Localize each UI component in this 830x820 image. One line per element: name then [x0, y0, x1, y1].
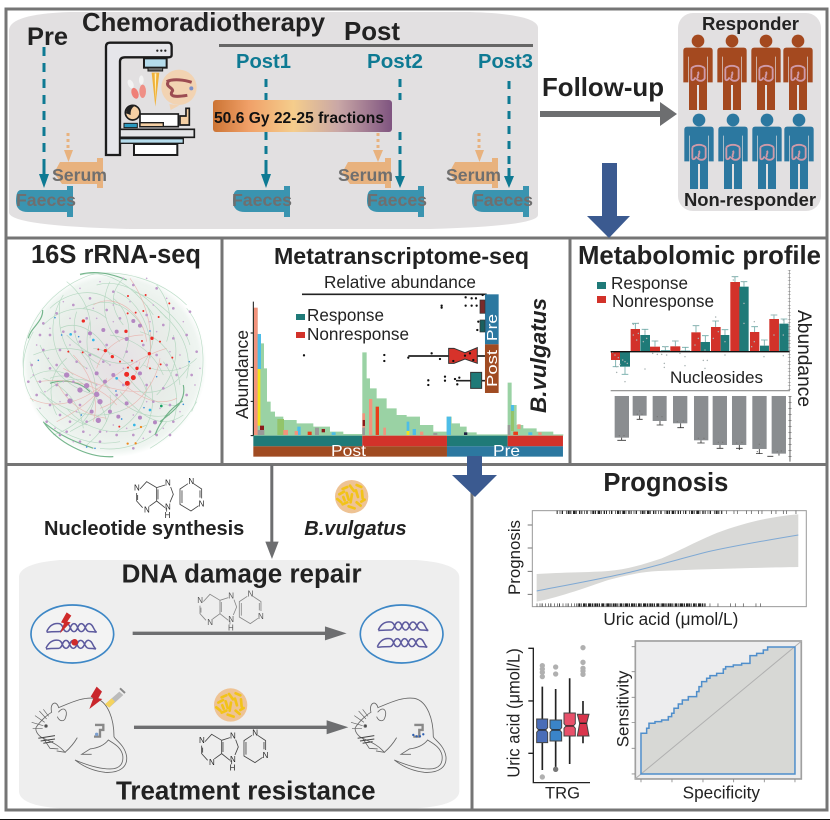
- chart: uric acid boxplot: TRG: [545, 783, 580, 802]
- chart: uric acid boxplot: [503, 648, 590, 802]
- label: Pre side strip: Pre: [484, 314, 501, 341]
- post bracket line: [219, 44, 533, 47]
- icon: radiation bolt: [89, 687, 102, 709]
- chart: ROC curve: Specificity: [683, 782, 760, 802]
- icon: purine molecule light: N: [228, 615, 234, 624]
- panel: Metatranscriptome-seq: Metatranscriptome-seq: [274, 243, 529, 269]
- panel: Prognosis: [503, 469, 806, 802]
- icon: purine molecule: N: [165, 502, 171, 511]
- dose bar: 50.6 Gy 22-25 fractions: 50.6 Gy 22-25 fractions: [214, 110, 384, 127]
- icon: purine molecule light: [197, 591, 237, 633]
- network graph: [21, 272, 207, 457]
- icon: pyrimidine molecule light: [239, 590, 264, 624]
- heading: Prognosis: Prognosis: [603, 469, 728, 497]
- tube: faeces post2: Faeces: [367, 190, 427, 210]
- icons: responder people: [683, 35, 813, 110]
- label: B.vulgatus: B.vulgatus: [304, 518, 407, 540]
- panel: responder groups: Non-responder: [684, 189, 816, 210]
- label: Pre strip: Pre: [493, 443, 520, 460]
- icon: purine molecule lower: N: [230, 755, 236, 764]
- label: Post: Post: [344, 18, 400, 46]
- icon: bacteria middle: [214, 688, 247, 722]
- arrow: treatment resistance: [134, 720, 348, 734]
- tube: faeces post1: Faeces: [232, 190, 292, 210]
- tube: faeces pre: [16, 186, 76, 217]
- chart: ROC curve: [613, 641, 802, 802]
- panel: Metabolomic profile: [578, 242, 821, 462]
- tube: serum post3: [446, 158, 501, 188]
- icon: pyrimidine molecule: N: [188, 477, 194, 486]
- icon: purine molecule: N: [144, 505, 150, 514]
- icon: purine molecule: H: [165, 511, 171, 520]
- icon: purine molecule lower: [199, 731, 238, 773]
- label: Post2: Post2: [367, 51, 423, 73]
- icon: purine molecule lower: N: [199, 736, 205, 745]
- icon: pyrimidine molecule lower: [244, 729, 269, 763]
- title: Chemoradiotherapy: Chemoradiotherapy: [82, 9, 326, 37]
- panel: Metabolomic profile: Metabolomic profile: [578, 242, 821, 270]
- heading: DNA damage repair: DNA damage repair: [122, 558, 362, 588]
- arrow: serum sampling 2: [373, 133, 383, 162]
- icon: purine molecule: [134, 479, 173, 520]
- chart: prognosis curve: [505, 511, 806, 629]
- icon: damaged DNA cell: [31, 605, 114, 663]
- panel: 16S rRNA-seq: 16S rRNA-seq: [31, 241, 201, 269]
- heading: Treatment resistance: Treatment resistance: [116, 777, 376, 805]
- arrow: to omics panels: [587, 163, 630, 238]
- label: Pre: Pre: [27, 23, 68, 51]
- dose bar: 50.6 Gy 22-25 fractions: [213, 79, 400, 132]
- legend: nonresponse: Nonresponse: [612, 291, 714, 311]
- label: Post strip: Post: [331, 443, 367, 460]
- chart: prognosis curve: Prognosis: [505, 520, 524, 595]
- chart: prognosis curve: Uric acid (μmol/L): [603, 609, 738, 629]
- arrow: DNA repair: [133, 626, 347, 640]
- tube: serum pre: [52, 158, 107, 188]
- panel: mechanism: [19, 465, 459, 808]
- panel: 16S rRNA-seq: [21, 241, 207, 457]
- icon: syringe: [105, 688, 125, 708]
- arrow: post3 faeces sampling: [504, 81, 514, 188]
- panel: Metatranscriptome-seq: [232, 243, 563, 460]
- icons: non-responder people: [684, 114, 814, 189]
- icon: purine molecule: N: [165, 479, 171, 488]
- icon: repaired DNA cell: [360, 605, 443, 663]
- label: Follow-up: Follow-up: [542, 74, 664, 102]
- icon: purine molecule: N: [134, 483, 140, 492]
- icon: pyrimidine molecule: N: [199, 499, 205, 508]
- icon: bacteria: [335, 480, 368, 513]
- panel: DNA damage repair background: [19, 560, 459, 808]
- label: Post side strip: Post: [484, 349, 501, 387]
- icon: pyrimidine molecule lower: N: [263, 751, 269, 760]
- icon: pyrimidine molecule light: N: [248, 590, 254, 599]
- chart: uric acid boxplot: Uric acid (μmol/L): [503, 648, 523, 778]
- icon: resistant mouse: [351, 698, 446, 772]
- label: Nucleotide synthesis: Nucleotide synthesis: [44, 518, 244, 540]
- tube: faeces pre: Faeces: [16, 190, 76, 210]
- icon: purine molecule lower: N: [230, 731, 236, 740]
- icon: pyrimidine molecule: [180, 477, 205, 511]
- label: B.vulgatus: B.vulgatus: [526, 298, 551, 413]
- icon: purine molecule lower: H: [230, 764, 236, 773]
- tube: faeces post2: [367, 186, 427, 217]
- panel: responder groups: Responder: [702, 13, 799, 34]
- label: Post3: Post3: [478, 51, 533, 73]
- panel: treatment timeline background: [9, 12, 538, 229]
- icon: pyrimidine molecule lower: N: [252, 729, 258, 738]
- label: Nucleosides: Nucleosides: [670, 368, 763, 387]
- tube: faeces post3: Faeces: [473, 190, 533, 210]
- bar chart: nucleosides: [611, 270, 790, 462]
- legend: response: Response: [307, 306, 384, 325]
- arrow: post1 faeces sampling: [261, 132, 271, 188]
- icon: purine molecule light: N: [228, 591, 234, 600]
- tube: faeces post3: [472, 186, 533, 217]
- icon: radiotherapy machine: [106, 43, 197, 155]
- tube: serum post3: Serum: [446, 165, 501, 185]
- label: Post1: Post1: [236, 51, 291, 73]
- tube: serum pre: Serum: [52, 165, 107, 185]
- tube: serum post2: Serum: [338, 165, 393, 185]
- icon: purine molecule light: N: [207, 618, 213, 627]
- arrow: serum sampling 1: [64, 133, 73, 162]
- icon: treated mouse: [32, 698, 127, 772]
- panel: responder groups: [678, 13, 821, 211]
- icon: pyrimidine molecule light: N: [258, 612, 264, 621]
- axis label: abundance: Abundance: [793, 310, 814, 407]
- arrow: to lower panels: [452, 456, 497, 497]
- arrow: pre faeces sampling: [39, 47, 49, 188]
- arrow: post2 faeces sampling: [395, 132, 405, 188]
- axis label: abundance: Abundance: [232, 330, 252, 419]
- chart: ROC curve: Sensitivity: [613, 670, 632, 747]
- tube: faeces post1: [232, 186, 292, 217]
- arrow: to DNA damage repair: [265, 465, 279, 559]
- icon: purine molecule light: N: [197, 596, 203, 605]
- stacked bar chart with boxplot: [251, 294, 563, 457]
- tube: serum post2: [338, 158, 393, 188]
- icon: purine molecule light: H: [228, 624, 234, 633]
- label: relative abundance: Relative abundance: [324, 272, 476, 292]
- legend: response: Response: [611, 274, 688, 293]
- arrow: serum sampling 3: [475, 133, 484, 162]
- icon: purine molecule lower: N: [209, 758, 215, 767]
- legend: nonresponse: Nonresponse: [307, 324, 409, 344]
- arrow: follow-up: [540, 102, 677, 126]
